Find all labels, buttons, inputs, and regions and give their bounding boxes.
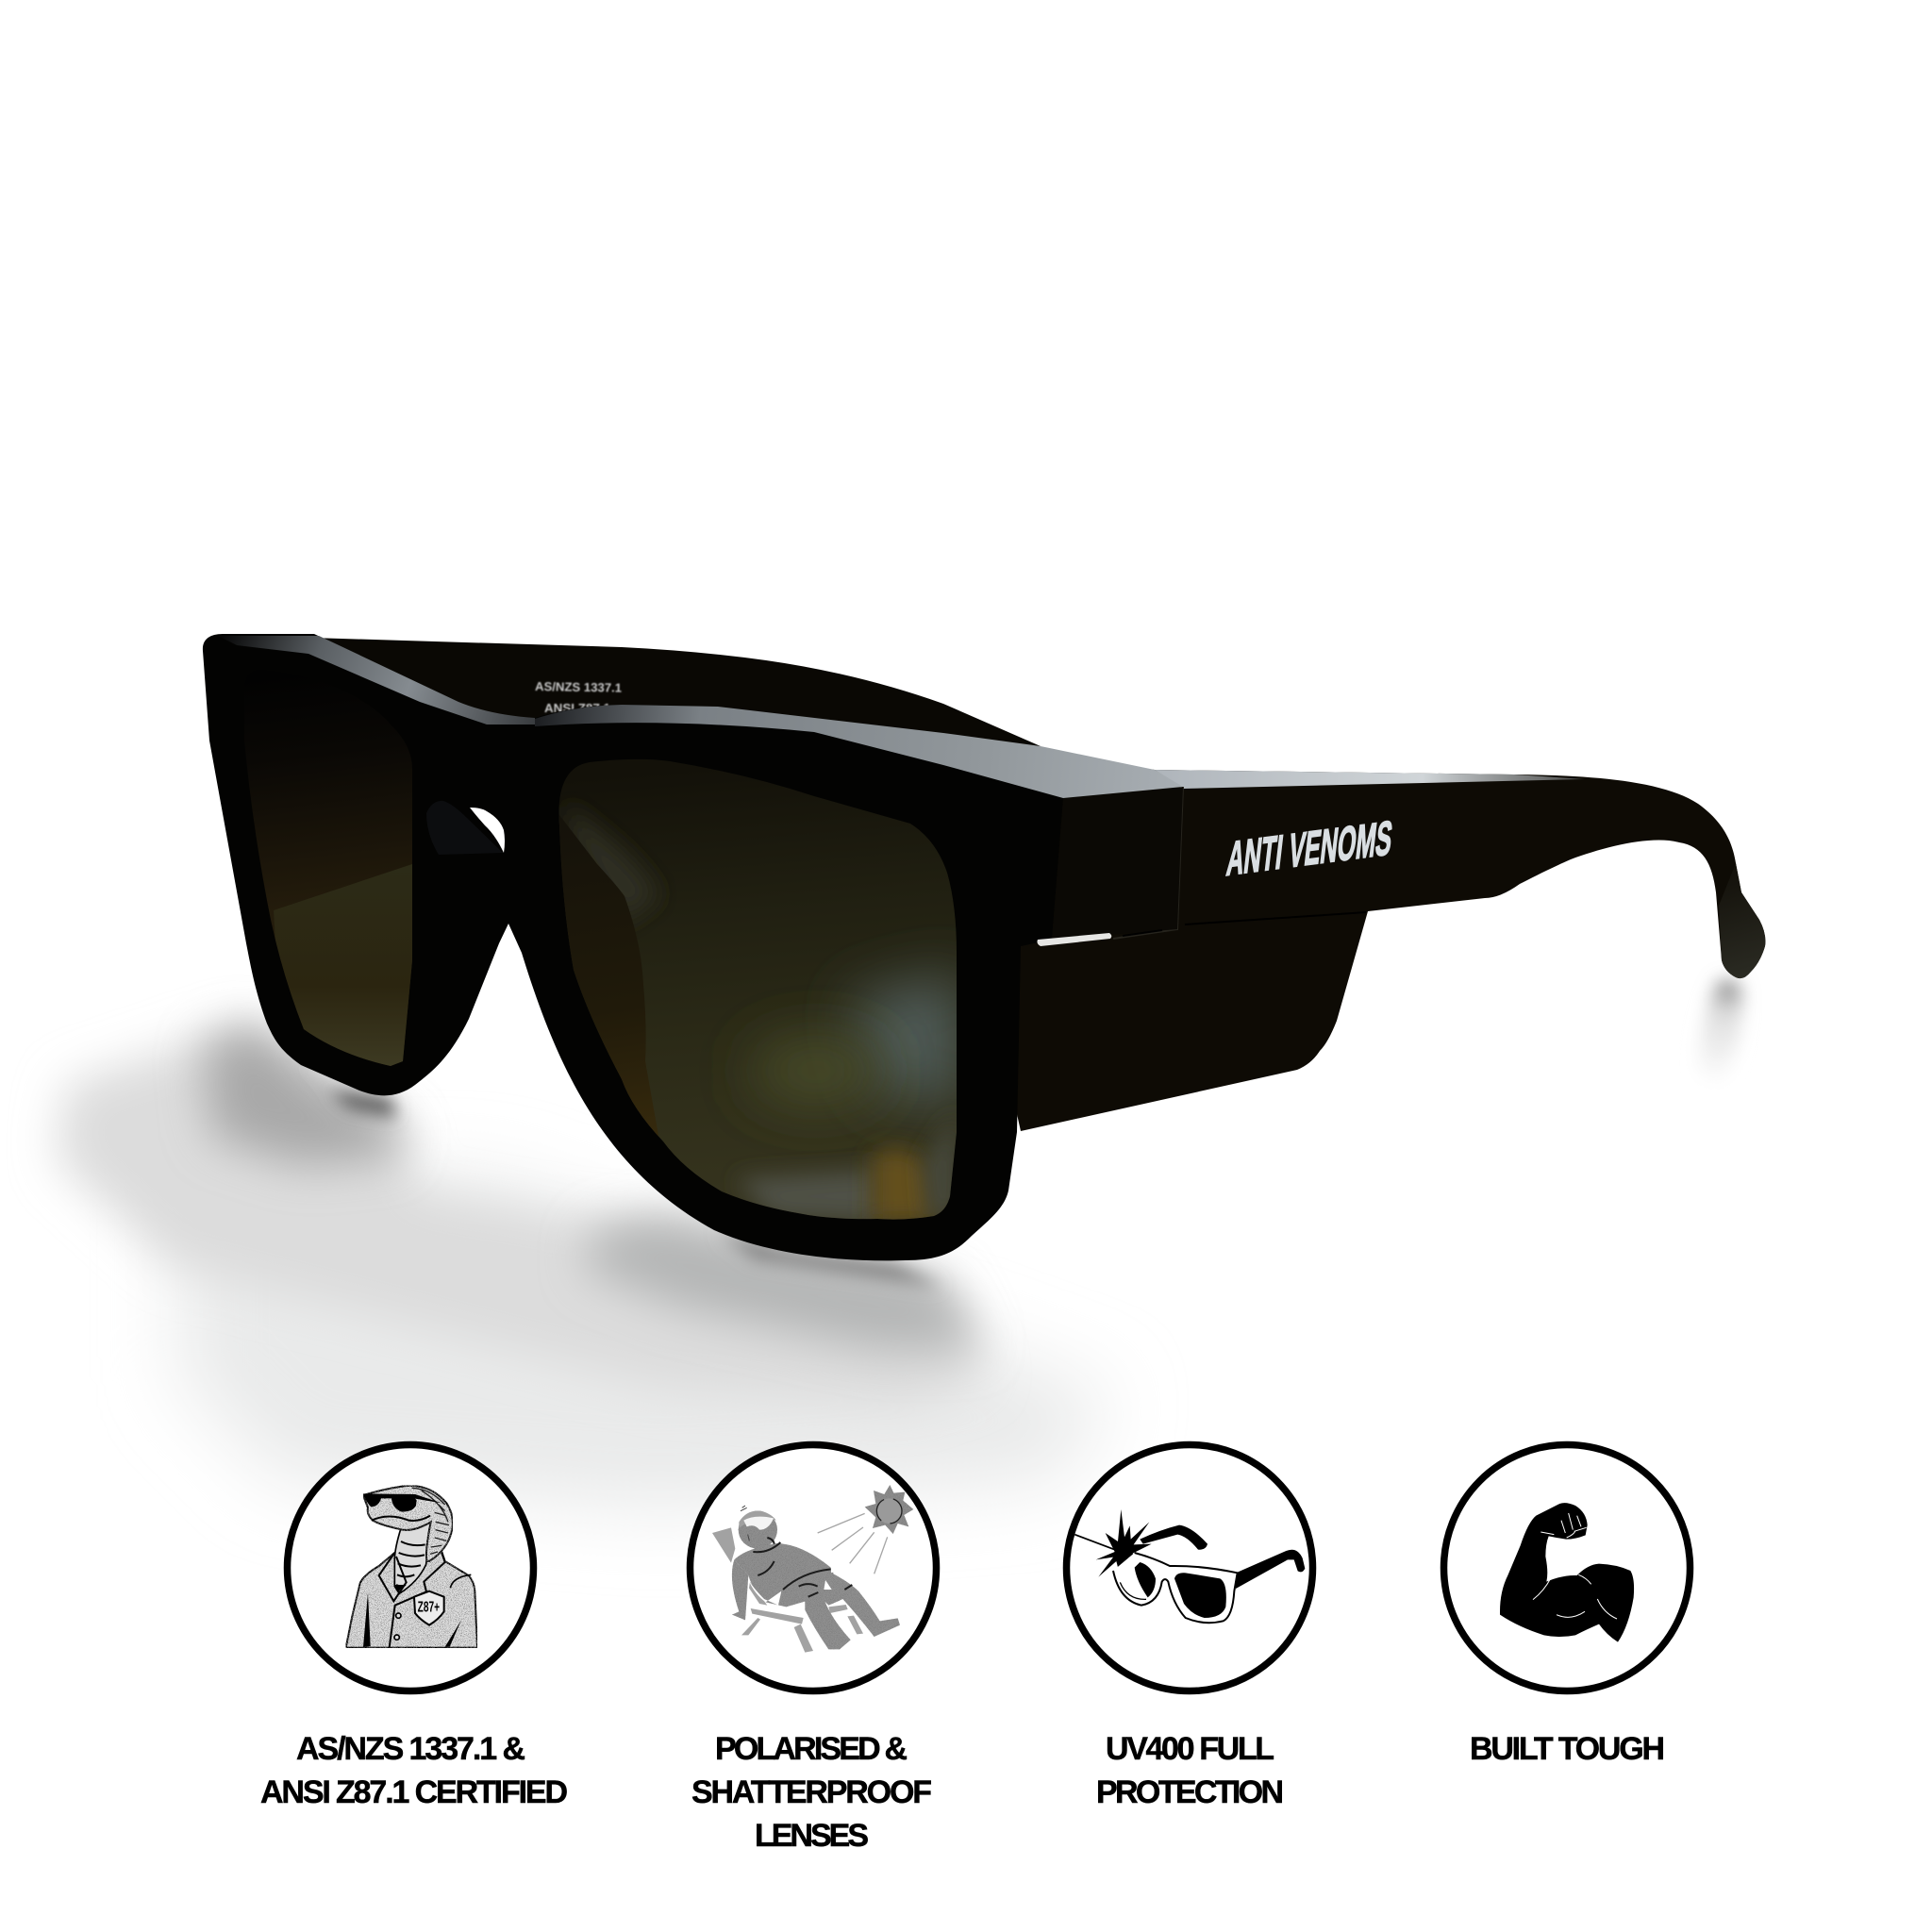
engraved certification text on inner arm: ANSI Z87.1 (544, 701, 610, 715)
near temple arm and side shield (1000, 755, 1765, 1131)
icon: sunglasses struck by UV ray (1074, 1509, 1305, 1623)
soft floor shadows (57, 1024, 1113, 1509)
right lens (547, 755, 962, 1226)
engraved certification text on inner arm (535, 679, 622, 715)
feature label: UV protection (1096, 1731, 1284, 1810)
icon: snake in lab coat (346, 1486, 477, 1648)
badge 4: built tough (1443, 1445, 1690, 1690)
sunglasses (203, 634, 1765, 1260)
feature label: UV protection: PROTECTION (1096, 1774, 1284, 1810)
badge ring (287, 1445, 534, 1690)
frame top surface right (535, 705, 1183, 798)
feature label: UV protection: UV400 FULL (1106, 1731, 1274, 1767)
lens grey-green reflection (849, 972, 962, 1104)
badge 3: UV protection (1066, 1445, 1313, 1690)
feature label: lenses (691, 1731, 932, 1854)
badge 1: certification (287, 1445, 534, 1690)
feature label: lenses: SHATTERPROOF (691, 1774, 932, 1810)
lens right grey sliver (924, 1113, 957, 1217)
front corner face (1052, 787, 1183, 940)
feature label: certification: ANSI Z87.1 CERTIFIED (260, 1774, 568, 1810)
hinge block seam (1113, 787, 1183, 939)
badge ring (691, 1445, 936, 1690)
temple top highlight (1155, 770, 1585, 789)
lens upper reflection (568, 815, 657, 919)
feature label: lenses: LENSES (755, 1818, 869, 1854)
temple tip shadow (1698, 980, 1742, 1085)
lens olive reflection (750, 1039, 882, 1103)
brand logo: ANTI VENOMS (1224, 810, 1395, 886)
feature label: lenses: POLARISED & (715, 1731, 908, 1767)
feature label: certification (260, 1731, 568, 1810)
nose pad (426, 801, 503, 855)
feature label: built tough: BUILT TOUGH (1470, 1731, 1665, 1767)
icon: snake in lab coat: Z87+ (418, 1600, 440, 1616)
lens lower grey reflection (736, 1170, 877, 1222)
bridge opening (470, 808, 505, 853)
lens amber reflection (873, 1149, 934, 1222)
frame top surface left (218, 636, 535, 724)
front frame (203, 634, 1063, 1260)
badge 2: polarised lenses (691, 1445, 936, 1690)
hinge rivet highlight (1037, 933, 1111, 946)
lens dark left strip (560, 820, 658, 1136)
badge ring (1443, 1445, 1690, 1690)
engraved certification text on inner arm: AS/NZS 1337.1 (535, 679, 622, 695)
badge ring (1066, 1445, 1313, 1690)
temple tip sheen (1719, 863, 1765, 978)
icon: flexed arm (1500, 1503, 1634, 1642)
infographic: sunglasses product with four feature badges (45, 634, 1766, 1847)
shield seam (1123, 912, 1366, 936)
sun (865, 1485, 913, 1534)
feature label: certification: AS/NZS 1337.1 & (296, 1731, 525, 1767)
far temple arm seen behind the frame (311, 638, 1041, 750)
left lens (247, 749, 412, 1066)
icon: man sunbathing (712, 1485, 913, 1653)
